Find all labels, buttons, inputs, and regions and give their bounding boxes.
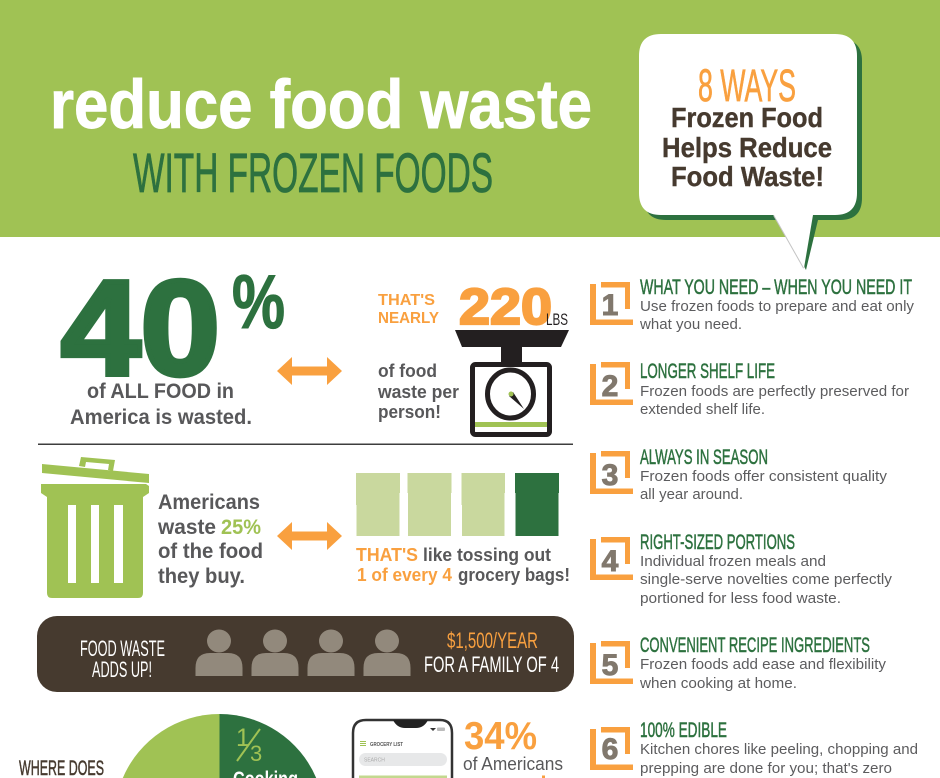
stat: 220 lbs per person: THAT'S: [378, 292, 435, 309]
arrow: 40 percent to 220 lbs: [277, 357, 342, 385]
icon: kitchen scale: [455, 330, 569, 434]
icon: phone with grocery list: SEARCH: [364, 758, 385, 764]
callout: 8 ways speech bubble: [639, 34, 862, 270]
callout: 8 ways speech bubble: Frozen Food: [671, 102, 823, 133]
list item 4: portioned for less food waste.: [640, 590, 841, 607]
stat: 220 lbs per person: of food: [378, 361, 437, 381]
list item 1: what you need.: [639, 316, 742, 333]
text: one of every four bags: grocery bags!: [458, 565, 570, 585]
stat: 34 percent of Americans: of Americans: [463, 754, 563, 774]
list item 6: [590, 719, 918, 777]
icon: four grocery bags: [356, 473, 559, 536]
list item 5: Frozen foods add ease and flexibility: [640, 656, 886, 673]
list item 3: all year around.: [640, 486, 743, 503]
list item 6: Kitchen chores like peeling, chopping and: [640, 741, 918, 758]
list item 1: 1: [602, 289, 618, 322]
panel: food waste adds up: $1,500/YEAR: [447, 628, 538, 653]
title: WITH FROZEN FOODS: [133, 141, 493, 204]
list item 4: single-serve novelties come perfectly: [640, 571, 892, 588]
stat: 40 percent wasted: [61, 252, 285, 429]
list item 4: Individual frozen meals and: [640, 553, 826, 570]
list item 2: Frozen foods are perfectly preserved for: [640, 383, 909, 400]
stat: 34 percent of Americans: 34%: [464, 715, 537, 758]
pie chart: 1: [236, 724, 250, 752]
list item 4: [590, 531, 892, 607]
text: one of every four bags: 1 of every 4: [357, 565, 452, 585]
stat: 220 lbs per person: NEARLY: [378, 310, 439, 327]
header band: [0, 0, 940, 237]
text: one of every four bags: THAT'S: [356, 545, 418, 565]
list item 3: [590, 446, 887, 503]
callout: 8 ways speech bubble: Helps Reduce: [662, 132, 832, 163]
stat: 40 percent wasted: of ALL FOOD in: [87, 380, 234, 403]
callout: 8 ways speech bubble: 8 WAYS: [698, 60, 796, 111]
pie chart: 3: [250, 741, 262, 766]
list item 5: when cooking at home.: [639, 675, 797, 692]
stat: 40 percent wasted: 40: [61, 252, 220, 404]
text: one of every four bags: like tossing out: [423, 545, 551, 565]
list item 3: ALWAYS IN SEASON: [640, 446, 768, 469]
list item 4: RIGHT-SIZED PORTIONS: [640, 531, 795, 554]
list item 5: [590, 634, 886, 692]
list item 2: extended shelf life.: [640, 401, 765, 418]
stat: 220 lbs per person: [377, 278, 568, 422]
text: Americans waste 25 percent: waste: [157, 516, 216, 539]
list item 2: LONGER SHELF LIFE: [640, 360, 775, 383]
icon: phone with grocery list: GROCERY LIST: [370, 742, 404, 748]
list item 4: 4: [602, 545, 619, 578]
list item 1: [590, 276, 914, 333]
list item 6: 100% EDIBLE: [640, 719, 727, 742]
list item 3: 3: [602, 459, 618, 492]
list item 2: [590, 360, 909, 418]
stat: 220 lbs per person: waste per: [377, 382, 459, 402]
panel: food waste adds up: FOOD WASTE: [80, 636, 165, 661]
callout: 8 ways speech bubble: Food Waste!: [671, 161, 824, 192]
list item 6: 6: [602, 733, 618, 766]
list item 3: Frozen foods offer consistent quality: [640, 468, 887, 485]
text: Americans waste 25 percent: Americans: [158, 491, 260, 514]
arrow: 25 percent to grocery bags: [277, 522, 342, 550]
panel: food waste adds up: ADDS UP!: [92, 657, 152, 682]
text: Americans waste 25 percent: they buy.: [158, 565, 245, 588]
list item 2: 2: [602, 370, 618, 403]
panel: food waste adds up: [37, 616, 574, 692]
text: Americans waste 25 percent: [157, 491, 263, 588]
panel: food waste adds up: FOR A FAMILY OF 4: [424, 652, 559, 677]
stat: 34 percent of Americans: [463, 715, 563, 778]
pie chart: [123, 714, 316, 778]
title: reduce food waste: [50, 66, 592, 143]
text: Americans waste 25 percent: 25%: [221, 516, 261, 539]
stat: 40 percent wasted: America is wasted.: [70, 406, 252, 429]
stat: 40 percent wasted: %: [232, 260, 285, 345]
text: one of every four bags: [356, 545, 570, 585]
title: [50, 66, 592, 204]
list item 1: Use frozen foods to prepare and eat only: [640, 298, 914, 315]
icon: phone with grocery list: [353, 720, 452, 778]
list item 6: prepping are done for you; that's zero: [640, 760, 892, 777]
stat: 220 lbs per person: 220: [459, 278, 552, 335]
stat: 220 lbs per person: LBS: [546, 310, 568, 329]
list item 5: 5: [602, 649, 618, 682]
text: Americans waste 25 percent: of the food: [158, 540, 263, 563]
icon: trash can: [41, 457, 149, 598]
stat: 220 lbs per person: person!: [378, 402, 441, 422]
